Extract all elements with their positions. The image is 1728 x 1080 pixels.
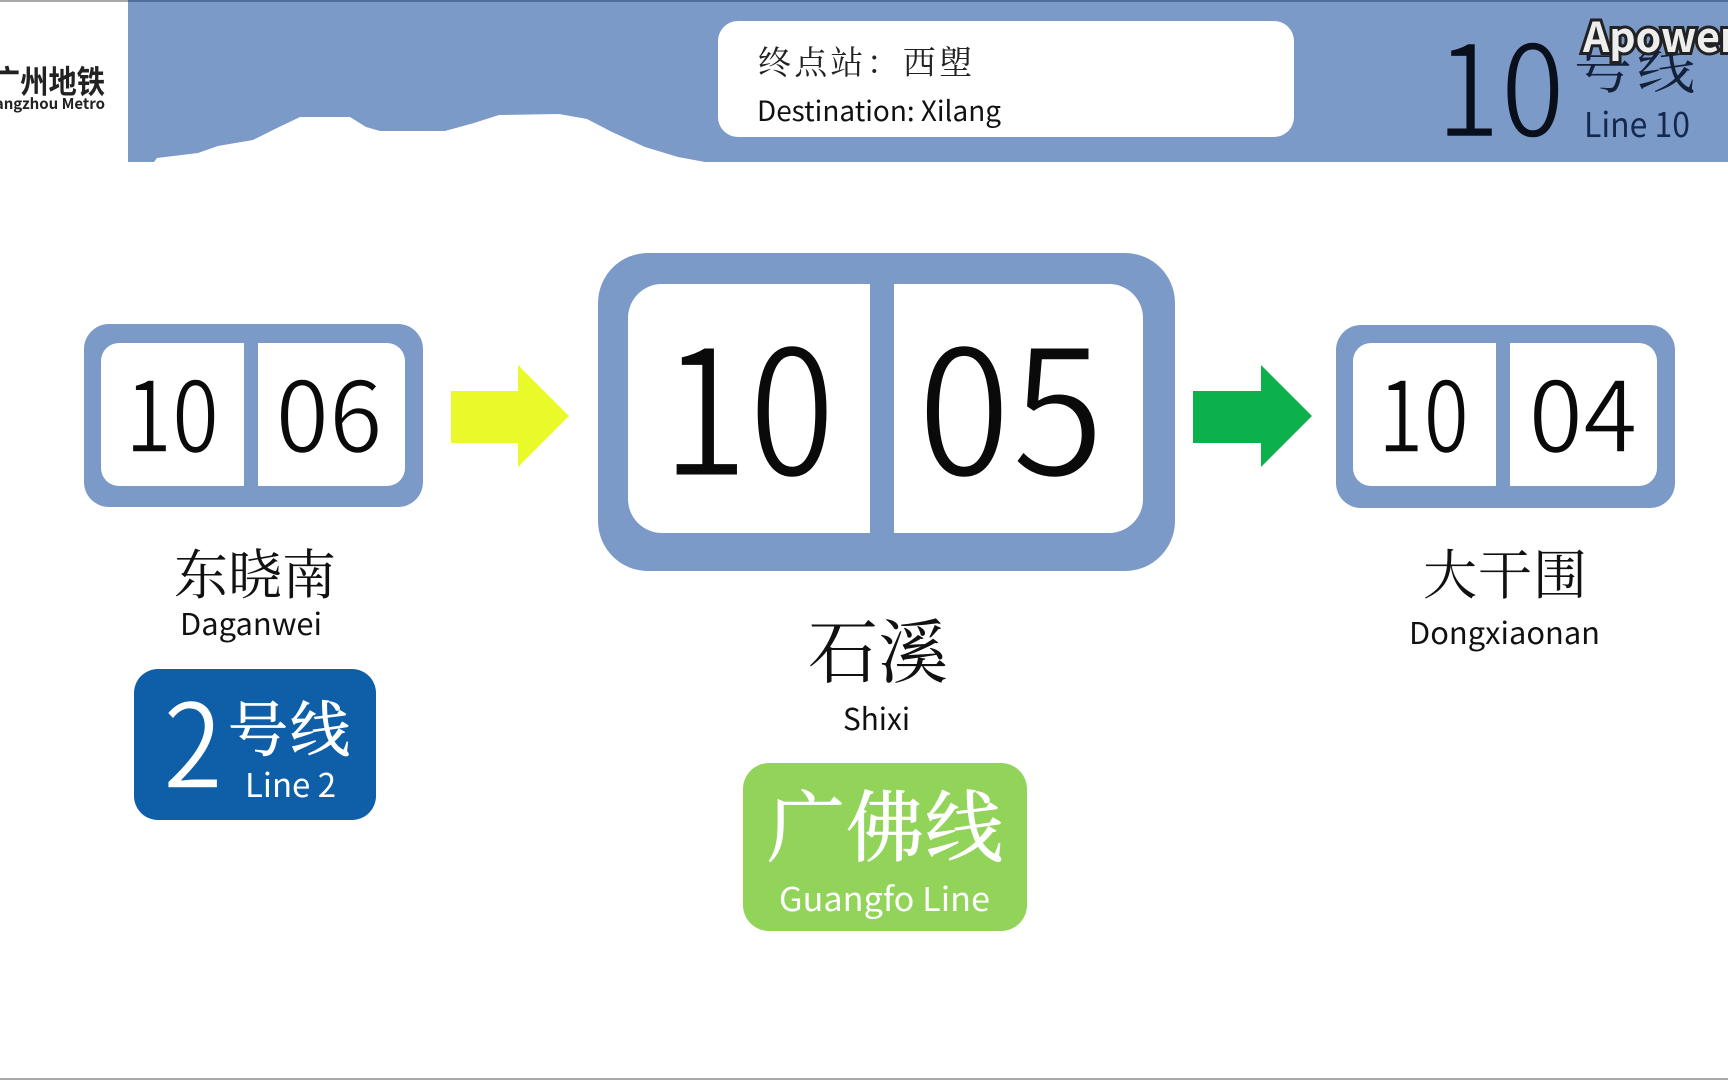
current line badge: Line 10: 号线 bbox=[1574, 36, 1695, 101]
header band with skyline bbox=[0, 0, 1728, 162]
station label: centre: 石溪 bbox=[808, 616, 948, 693]
next station time panel: 10 bbox=[1378, 339, 1469, 481]
previous station time panel bbox=[84, 324, 423, 507]
transfer badge: Guangfo Line bbox=[743, 763, 1027, 931]
station label: right: 大干围 bbox=[1423, 546, 1587, 606]
transfer badge: Line 2: Line 2 bbox=[245, 759, 336, 807]
transfer badge: Guangfo Line: Guangfo Line bbox=[779, 873, 990, 921]
transfer badge: Line 2: 号线 bbox=[228, 698, 350, 764]
arrow: green bbox=[1193, 365, 1312, 467]
station label: centre bbox=[808, 616, 948, 739]
current station time panel bbox=[598, 253, 1175, 571]
next station time panel: 04 bbox=[1528, 339, 1638, 481]
previous station time panel: 10 bbox=[125, 339, 219, 481]
transfer badge: Guangfo Line: 广佛线 bbox=[767, 785, 1003, 872]
current line badge: Line 10: Line 10 bbox=[1584, 98, 1690, 147]
station label: right: Dongxiaonan bbox=[1409, 609, 1600, 653]
next station time panel bbox=[1336, 325, 1675, 508]
destination box: Destination: Xilang bbox=[757, 90, 1001, 130]
station label: left bbox=[174, 546, 336, 644]
current station time panel: 10 bbox=[662, 272, 836, 527]
current station time panel: 05 bbox=[917, 272, 1105, 527]
station label: centre: Shixi bbox=[843, 695, 910, 739]
destination box: 终点站：西塱 bbox=[758, 45, 972, 82]
transfer badge: Line 2 bbox=[134, 652, 376, 822]
destination box bbox=[718, 21, 1294, 137]
station label: left: Daganwei bbox=[180, 600, 322, 644]
transfer badge: Line 2: 2 bbox=[163, 652, 223, 822]
station label: left: 东晓南 bbox=[174, 546, 336, 606]
previous station time panel: 06 bbox=[276, 339, 382, 481]
current line badge: Line 10 bbox=[1436, 0, 1695, 174]
station label: right bbox=[1409, 546, 1600, 653]
arrow: yellow bbox=[451, 365, 569, 467]
